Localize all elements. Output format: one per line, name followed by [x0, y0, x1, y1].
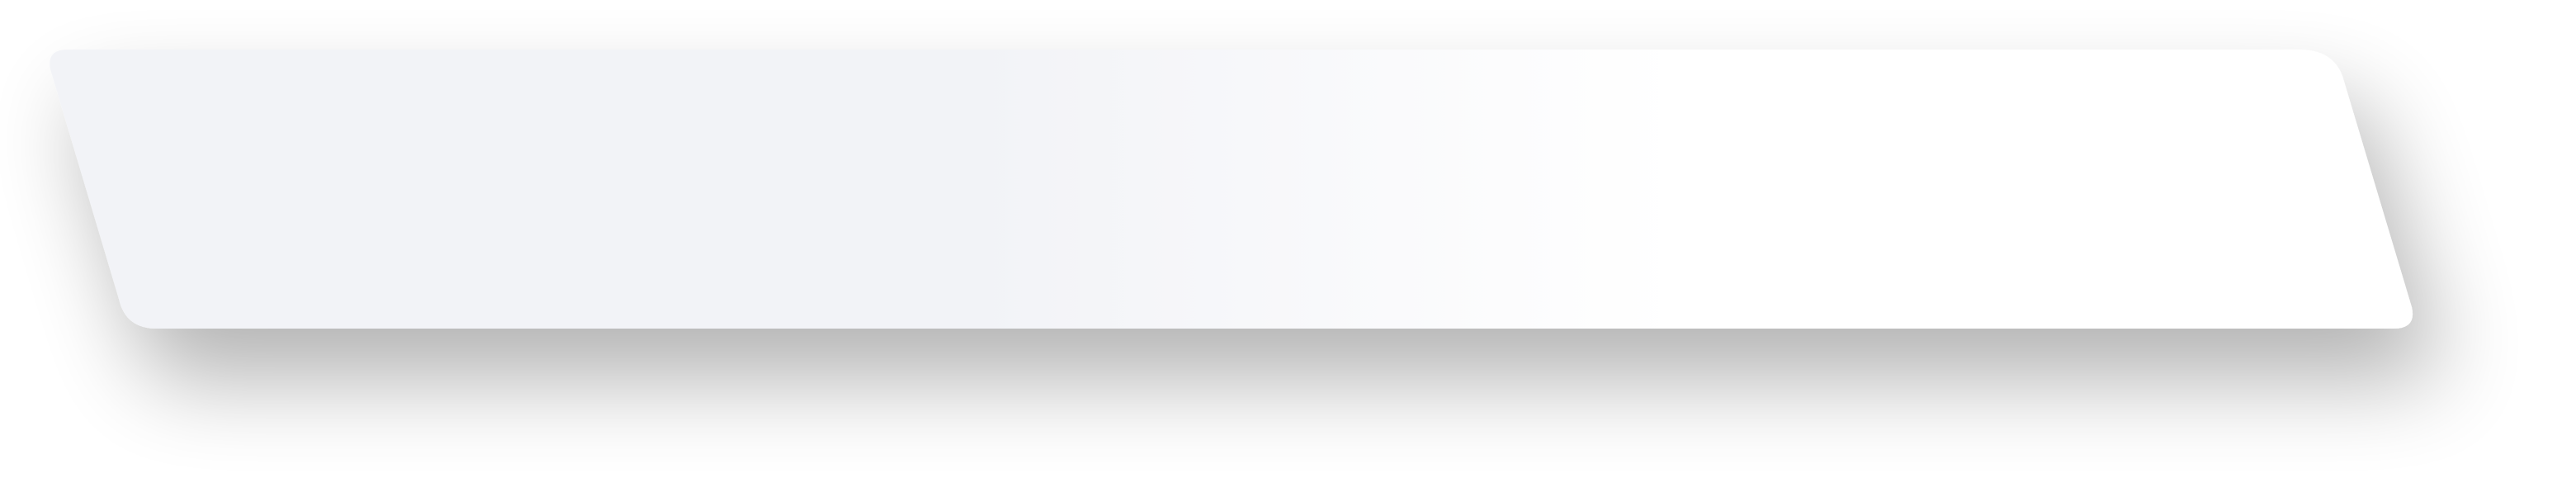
banner shape — [50, 50, 2413, 329]
